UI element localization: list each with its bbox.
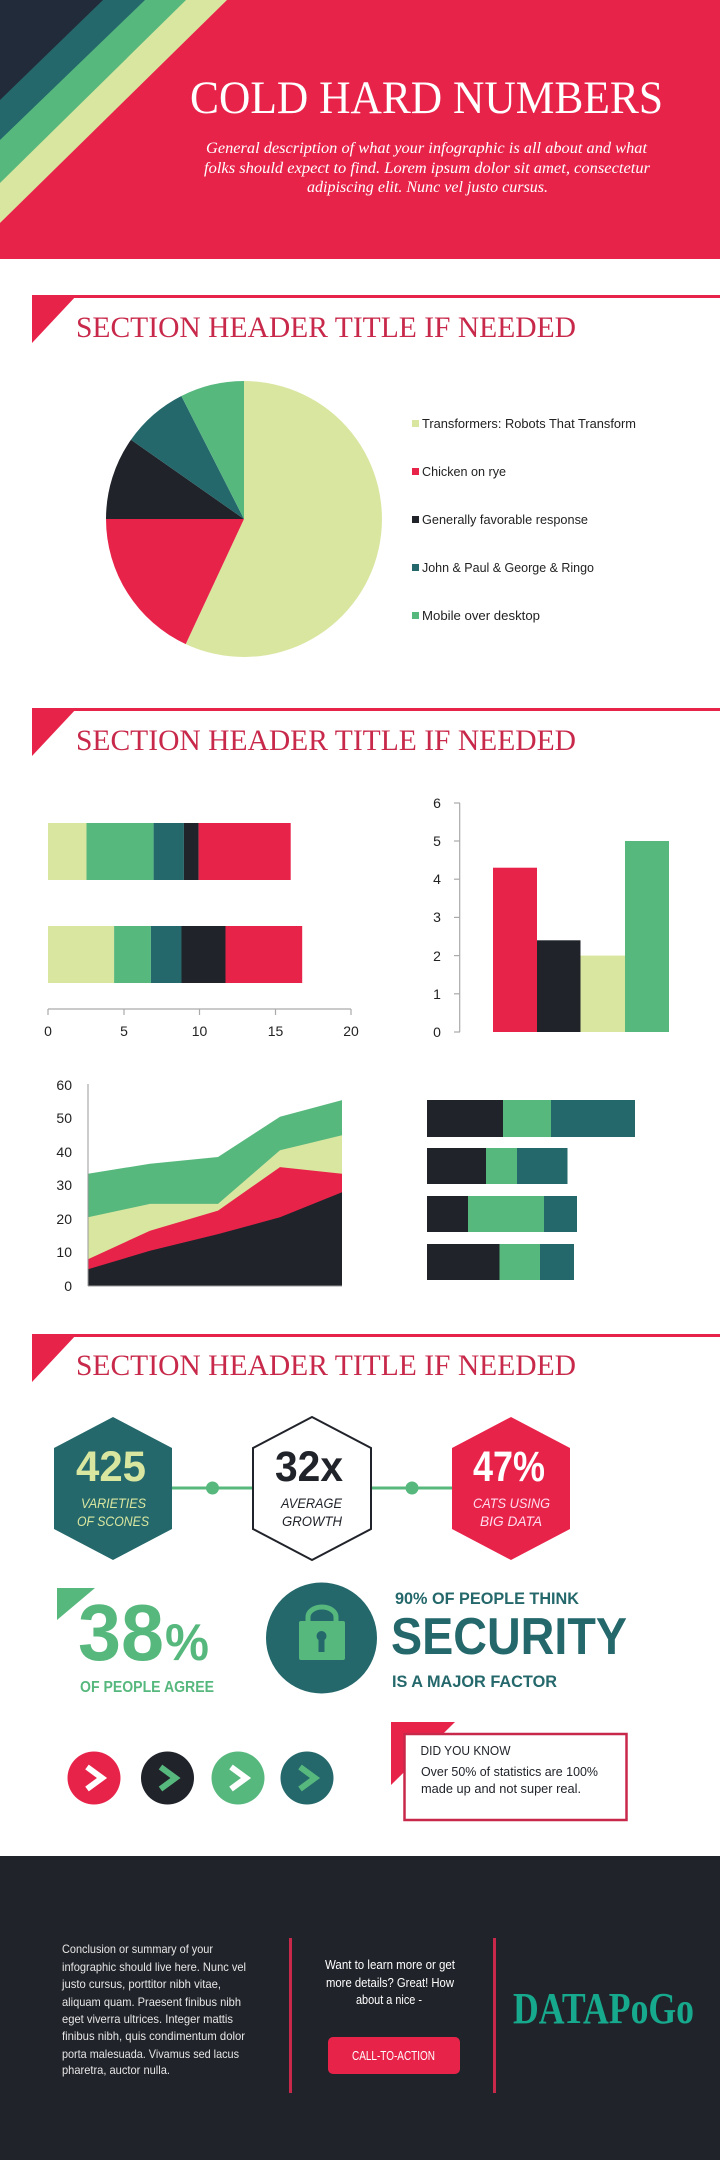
section header 2: SECTION HEADER TITLE IF NEEDED (76, 724, 576, 757)
footer conclusion text: eget viverra ultrices. Integer mattis (62, 2012, 233, 2026)
hexagon: 425: 425 (76, 1443, 146, 1491)
footer conclusion text: porta malesuada. Vivamus sed lacus (62, 2047, 239, 2061)
pie legend: Transformers: Robots That Transform (422, 417, 636, 431)
button (328, 2037, 460, 2074)
area chart: 20 (56, 1211, 72, 1227)
section header 2 (32, 708, 720, 757)
stacked horizontal bar chart: 15 (268, 1023, 283, 1039)
footer call to action text: Want to learn more or get (325, 1958, 455, 1972)
footer conclusion text: Conclusion or summary of your (62, 1942, 213, 1956)
callout: did you know: made up and not super real. (421, 1782, 581, 1796)
stat: security: 90% OF PEOPLE THINK (395, 1589, 580, 1608)
connector line (172, 1482, 452, 1494)
vertical bar chart: 4 (433, 871, 441, 887)
footer conclusion text: aliquam quam. Praesent finibus nibh (62, 1995, 241, 2009)
hexagon: 32x: AVERAGE (280, 1495, 343, 1511)
footer conclusion text: pharetra, auctor nulla. (62, 2063, 170, 2077)
stat: security (391, 1589, 627, 1691)
header banner (0, 0, 720, 259)
area chart: 40 (56, 1144, 72, 1160)
footer conclusion text: justo cursus, porttitor nibh vitae, (61, 1977, 221, 1991)
pie legend (412, 417, 636, 623)
pie legend: Mobile over desktop (422, 609, 540, 623)
subtitle: General description of what your infographic is all about and what (206, 140, 648, 157)
callout: did you know: Over 50% of statistics are 100% (421, 1765, 598, 1779)
footer conclusion text (61, 1942, 246, 2077)
hexagon: 47% (452, 1417, 570, 1560)
subtitle (204, 140, 651, 196)
hexagon: 47%: CATS USING (473, 1495, 550, 1511)
vertical bar chart: 5 (433, 833, 441, 849)
stacked horizontal bar chart: 0 (44, 1023, 52, 1039)
icon: lock (266, 1582, 377, 1694)
area chart (56, 1077, 342, 1294)
callout: did you know: DID YOU KNOW (420, 1744, 511, 1758)
pie legend: Generally favorable response (422, 513, 588, 527)
stacked horizontal bar chart: 20 (343, 1023, 359, 1039)
footer conclusion text: infographic should live here. Nunc vel (62, 1960, 246, 1974)
section header 3: SECTION HEADER TITLE IF NEEDED (76, 1349, 576, 1382)
vertical bar chart: 3 (433, 909, 441, 925)
area chart: 0 (64, 1278, 72, 1294)
stacked horizontal bar chart (44, 823, 359, 1039)
vertical bar chart (433, 795, 669, 1040)
vertical bar chart: 1 (433, 986, 441, 1002)
stat: 38% agree: % (165, 1614, 209, 1672)
arrow icons (68, 1752, 334, 1804)
hexagon: 32x (253, 1417, 371, 1560)
vertical bar chart: 0 (433, 1024, 441, 1040)
hexagon: 425: VARIETIES (81, 1495, 147, 1511)
hexagon: 32x: GROWTH (282, 1513, 343, 1529)
button: CALL-TO-ACTION (352, 2049, 435, 2063)
pie chart (106, 381, 382, 657)
stat: security: IS A MAJOR FACTOR (392, 1672, 557, 1691)
stat: 38% agree: 38 (78, 1588, 164, 1677)
callout: did you know (391, 1722, 626, 1820)
footer conclusion text: finibus nibh, quis condimentum dolor (62, 2029, 245, 2043)
area chart: 10 (56, 1244, 72, 1260)
hexagon: 425 (54, 1417, 172, 1560)
area chart: 60 (56, 1077, 72, 1093)
stat: 38% agree: OF PEOPLE AGREE (80, 1679, 214, 1696)
vertical bar chart: 6 (433, 795, 441, 811)
pie legend: Chicken on rye (422, 465, 506, 479)
section header 3 (32, 1334, 720, 1382)
stacked horizontal bar chart: 10 (192, 1023, 207, 1039)
vertical bar chart: 2 (433, 948, 441, 964)
footer call to action text: about a nice - (356, 1993, 422, 2007)
title: COLD HARD NUMBERS (190, 72, 663, 124)
pie legend: John & Paul & George & Ringo (422, 561, 594, 575)
decorative stripes (0, 0, 227, 223)
footer call to action text (325, 1958, 455, 2007)
stat: security: SECURITY (391, 1608, 627, 1666)
stacked bar chart right (427, 1100, 635, 1280)
hexagon: 32x: 32x (275, 1443, 343, 1491)
subtitle: folks should expect to find. Lorem ipsum dolor sit amet, consectetur (204, 160, 651, 177)
hexagon: 47%: 47% (473, 1443, 545, 1491)
footer (0, 1856, 720, 2160)
subtitle: adipiscing elit. Nunc vel justo cursus. (307, 179, 548, 196)
stat: 38% agree (57, 1588, 214, 1696)
footer call to action text: more details? Great! How (326, 1976, 455, 1990)
stacked horizontal bar chart: 5 (120, 1023, 128, 1039)
section header 1 (32, 295, 720, 344)
hexagon: 47%: BIG DATA (480, 1513, 542, 1529)
section header 1: SECTION HEADER TITLE IF NEEDED (76, 311, 576, 344)
hexagon: 425: OF SCONES (77, 1513, 150, 1529)
area chart: 30 (56, 1177, 72, 1193)
area chart: 50 (56, 1110, 72, 1126)
